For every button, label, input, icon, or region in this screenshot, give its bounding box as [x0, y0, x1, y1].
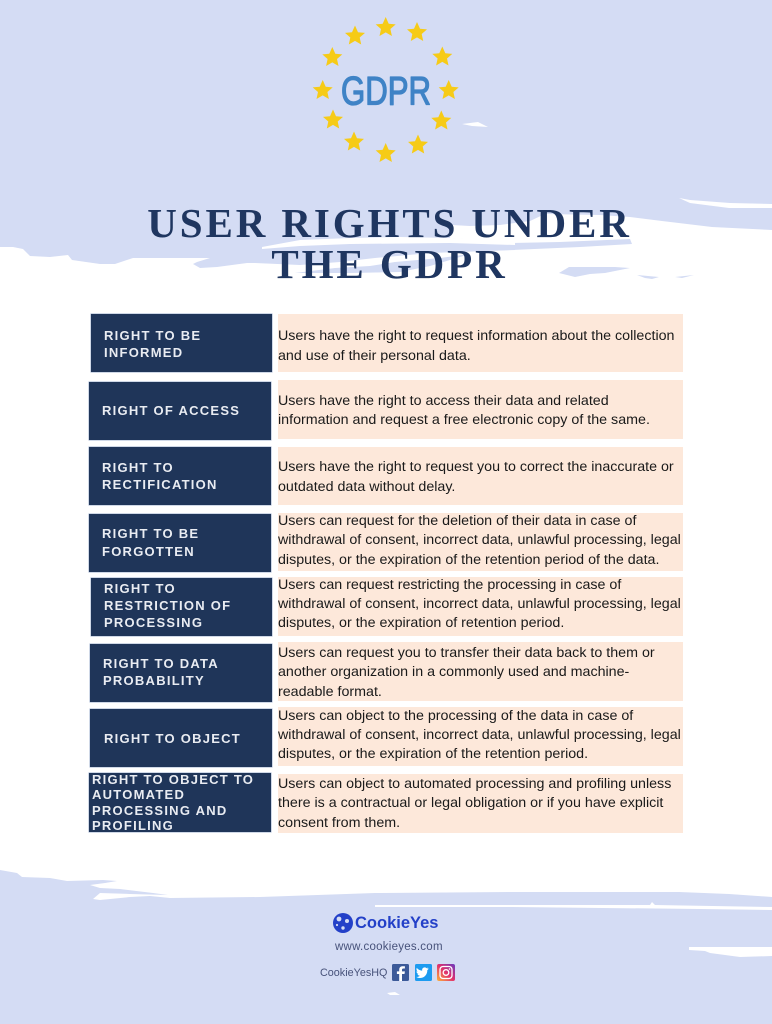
- row description: informed: Users have the right to request information about the collection: [278, 328, 674, 344]
- row label: right to be forgotten: [89, 514, 271, 572]
- row label: right to object to automated processing and profiling: RIGHT TO OBJECT TO: [92, 772, 254, 787]
- row label: right to object to automated processing and profiling: AUTOMATED: [92, 787, 185, 802]
- row description: access: Users have the right to access their data and related: [278, 393, 609, 409]
- row description: restriction: Users can request restricting the processing in case of: [278, 577, 621, 593]
- row description: rectification: Users have the right to request you to correct the inaccurate or: [278, 459, 674, 475]
- row label: right of access: RIGHT OF ACCESS: [102, 402, 240, 418]
- row description: automated processing: there is a contractual or legal obligation or if you have explicit: [278, 795, 663, 811]
- row label: right to be informed: RIGHT TO BE: [104, 328, 201, 342]
- row label: right to object: [90, 709, 272, 767]
- footer: website: www.cookieyes.com: [335, 941, 443, 953]
- row label: right to restriction of processing: RIGHT TO: [104, 581, 176, 596]
- row description: forgotten: withdrawal of consent, incorrect data, unlawful processing, legal: [278, 532, 681, 548]
- row description: data probability: another organization in a commonly used and machine-: [278, 664, 629, 680]
- row label: right to rectification: RIGHT TO: [102, 460, 174, 474]
- row description: forgotten: Users can request for the deletion of their data in case of: [278, 513, 636, 529]
- row label: right to rectification: RECTIFICATION: [102, 477, 218, 492]
- row label: right to be informed: [91, 314, 272, 372]
- GDPR logo with star ring: [312, 17, 459, 162]
- row label: right to object to automated processing and profiling: PROFILING: [92, 818, 174, 833]
- row description: rectification: [278, 447, 683, 505]
- row label: right to data probability: [90, 644, 272, 702]
- row description: restriction: disputes, or the expiration of retention period.: [278, 615, 564, 631]
- row label: right to object: RIGHT TO OBJECT: [104, 730, 241, 746]
- row label: right to data probability: RIGHT TO DATA: [103, 656, 219, 670]
- row label: right to restriction of processing: RESTRICTION OF: [104, 598, 231, 613]
- row label: right to restriction of processing: [91, 578, 272, 636]
- title: [147, 200, 632, 287]
- footer: brand name: CookieYes: [355, 914, 438, 932]
- row description: restriction: [278, 577, 683, 636]
- row description: automated processing: [278, 774, 683, 833]
- row label: right of access: [89, 382, 271, 440]
- title: THE GDPR: [271, 241, 508, 287]
- row description: access: [278, 380, 683, 439]
- row description: data probability: readable format.: [278, 684, 382, 700]
- footer: social handle: CookieYesHQ: [320, 967, 387, 979]
- row description: object: withdrawal of consent, incorrect data, unlawful processing, legal: [278, 727, 681, 743]
- row description: data probability: Users can request you to transfer their data back to them or: [278, 645, 655, 661]
- row label: right to be forgotten: FORGOTTEN: [102, 544, 195, 559]
- row label: right to be forgotten: RIGHT TO BE: [102, 526, 199, 541]
- row description: forgotten: [278, 513, 683, 571]
- row label: right to be informed: INFORMED: [104, 345, 183, 360]
- row description: informed: and use of their personal data.: [278, 348, 471, 364]
- row label: right to object to automated processing and profiling: PROCESSING AND: [92, 802, 227, 818]
- row label: right to rectification: [89, 447, 271, 505]
- row description: data probability: [278, 642, 683, 701]
- row description: automated processing: consent from them.: [278, 815, 400, 831]
- row label: right to object to automated processing and profiling: [89, 773, 271, 832]
- row description: rectification: outdated data without delay.: [278, 478, 455, 494]
- row description: object: Users can object to the processing of the data in case of: [278, 708, 633, 724]
- row description: informed: [278, 314, 683, 372]
- row description: object: disputes, or the expiration of the retention period.: [278, 746, 588, 762]
- title: USER RIGHTS UNDER: [147, 200, 632, 246]
- row label: right to data probability: PROBABILITY: [103, 673, 205, 688]
- row label: right to restriction of processing: PROCESSING: [104, 615, 203, 630]
- GDPR logo with star ring: GDPR: [341, 70, 431, 114]
- row description: forgotten: disputes, or the expiration of the retention period of the data.: [278, 552, 659, 568]
- row description: restriction: withdrawal of consent, incorrect data, unlawful processing, legal: [278, 596, 681, 612]
- row description: access: information and request a free electronic copy of the same.: [278, 412, 650, 428]
- row description: automated processing: Users can object to automated processing and profiling unless: [278, 776, 671, 792]
- row description: object: [278, 707, 683, 766]
